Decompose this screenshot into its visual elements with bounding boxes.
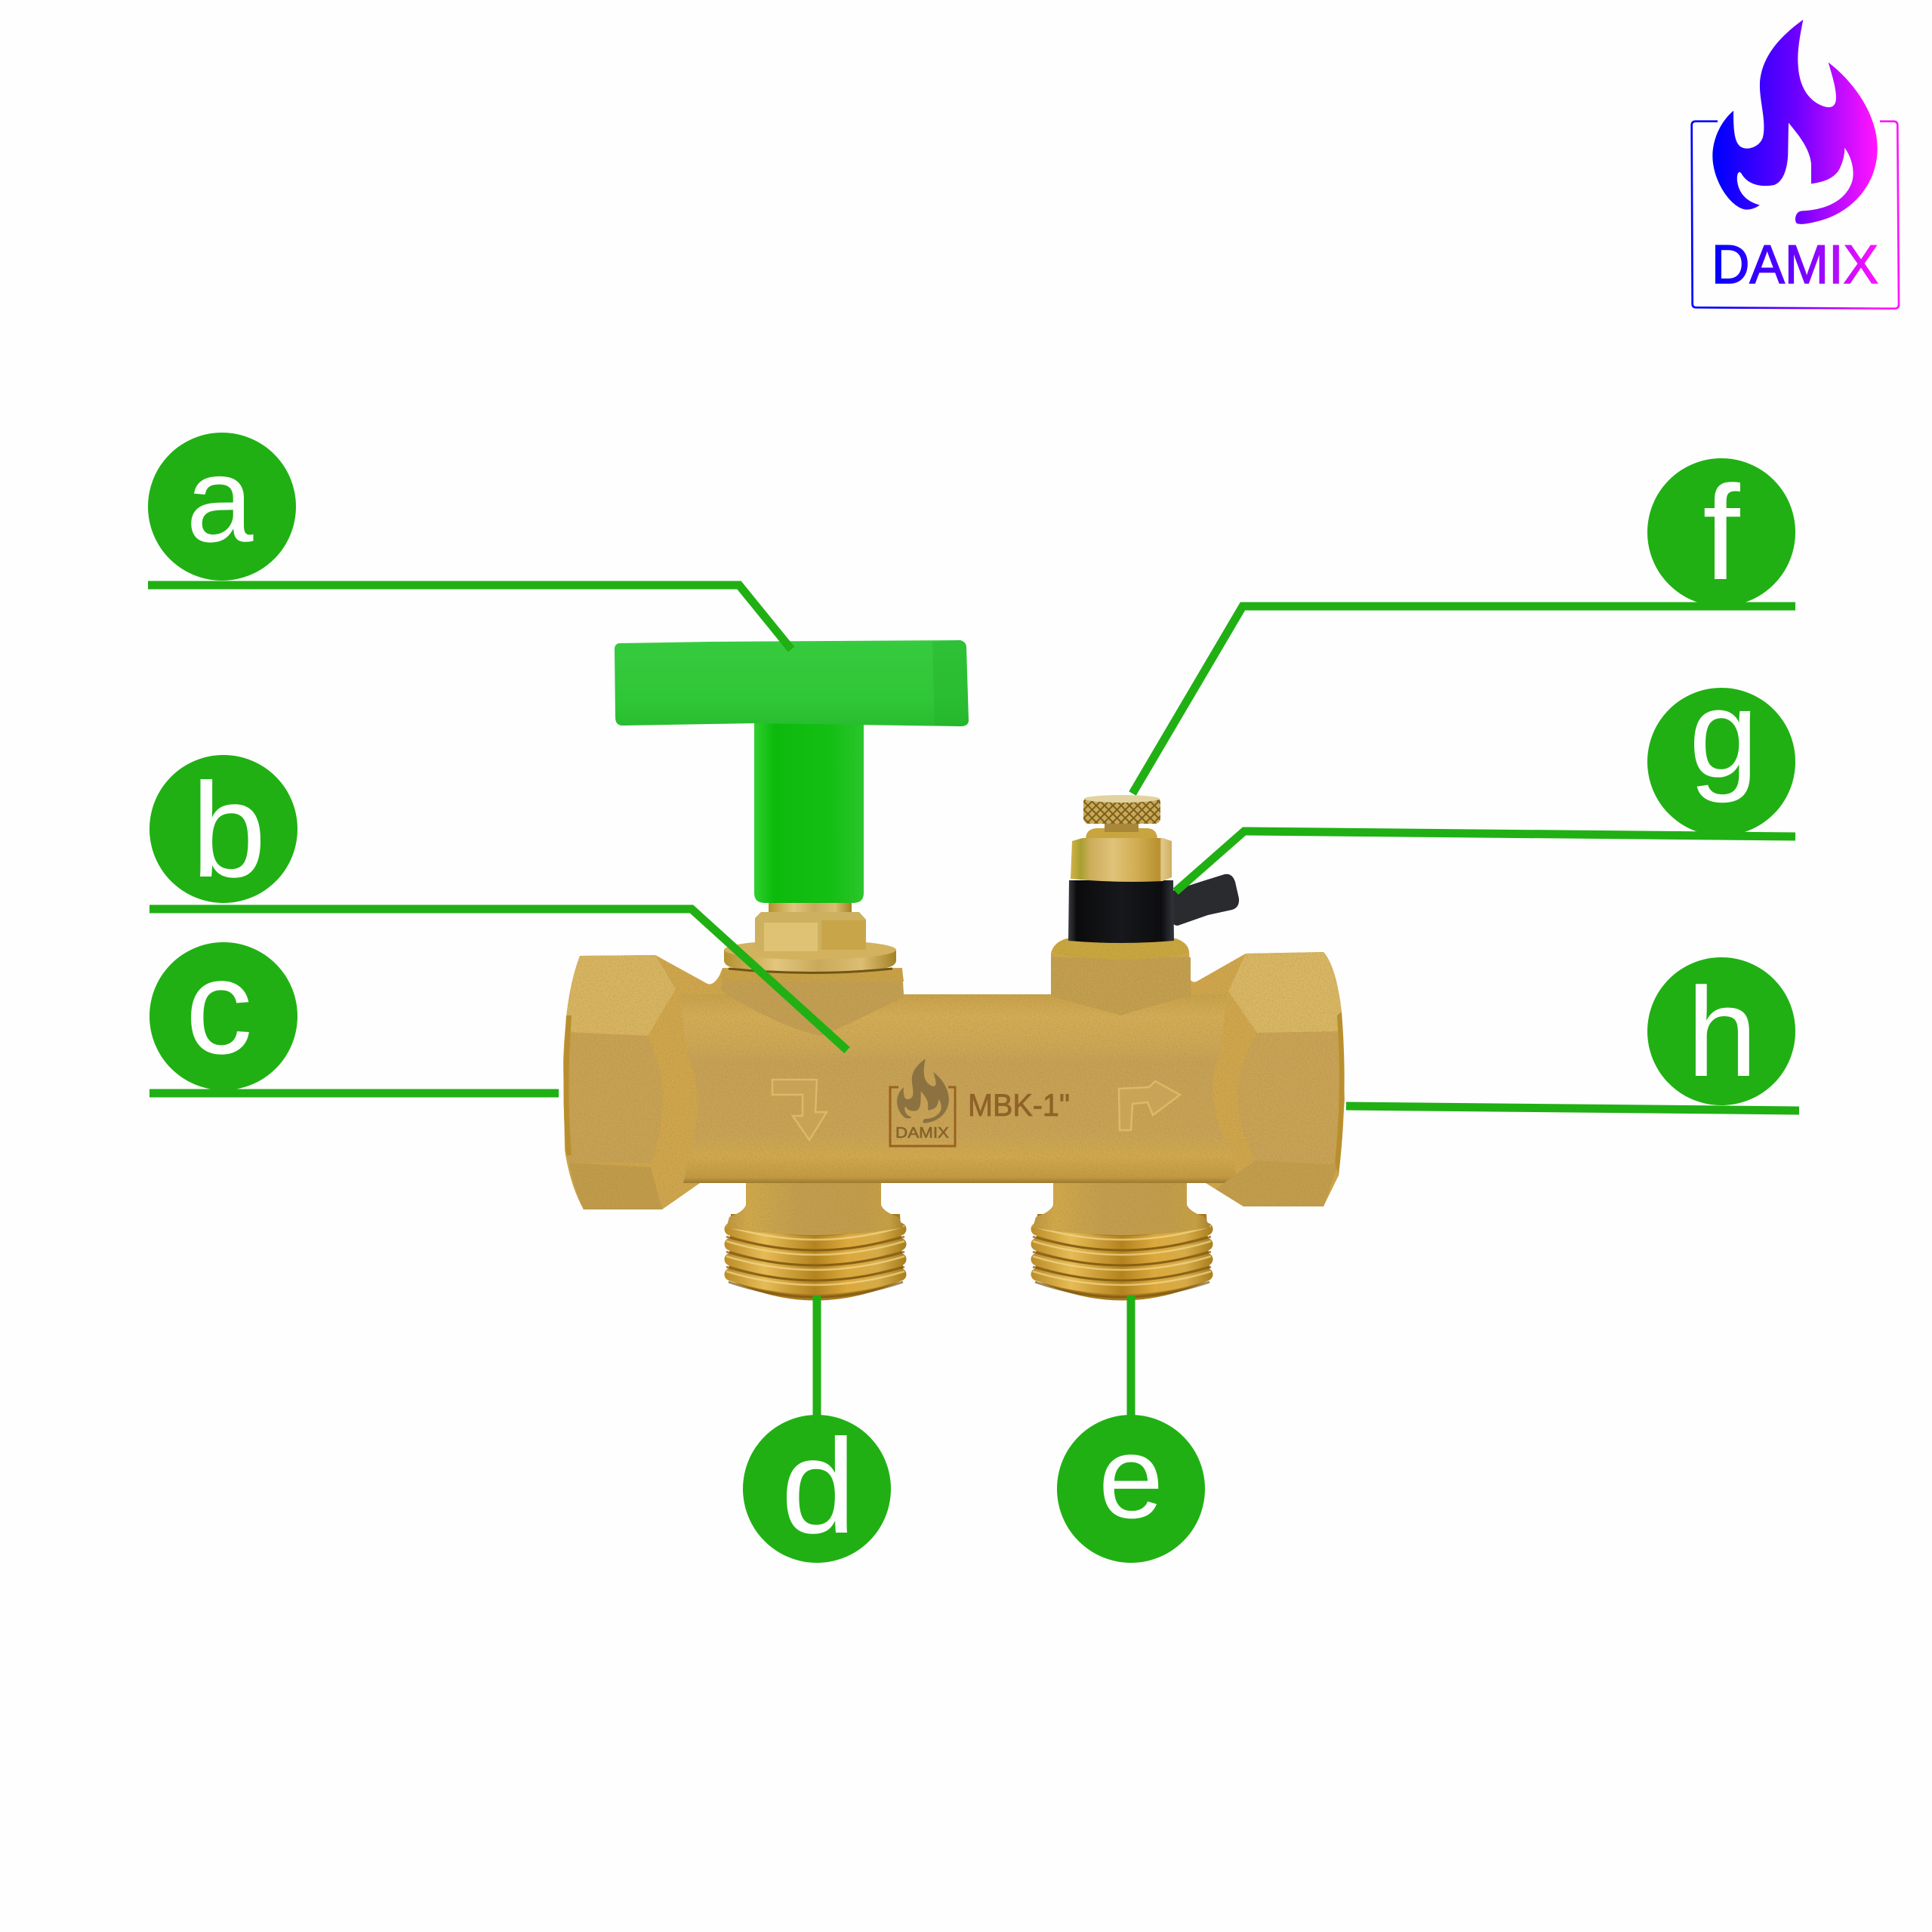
flange side [724, 950, 896, 972]
flange top [724, 940, 896, 960]
leader f [1132, 606, 1795, 793]
letter b: b [192, 755, 266, 905]
circle d [743, 1415, 891, 1563]
engraved arrow left [772, 1080, 827, 1140]
letter h: h [1687, 961, 1758, 1103]
logo frame [1692, 122, 1899, 309]
letter f: f [1702, 458, 1740, 608]
body silhouette [563, 938, 1345, 1209]
left neck rim [721, 969, 904, 981]
circle a [148, 433, 296, 581]
lower right neck and flare [1033, 1178, 1210, 1235]
engraved logo [890, 1058, 955, 1146]
left top neck shading [721, 972, 904, 1036]
green T handle [615, 640, 969, 903]
circle e [1057, 1415, 1205, 1563]
right neck rim [1053, 938, 1188, 960]
logo flame and frame [1692, 20, 1899, 309]
leader e [1126, 1296, 1135, 1434]
leader b [149, 909, 847, 1050]
product: brass manifold valve [563, 640, 1345, 1300]
leader d [812, 1296, 821, 1434]
engraved arrow right [1119, 1081, 1180, 1130]
inner thread slivers [563, 1012, 1345, 1176]
lower left neck and flare [726, 1178, 904, 1235]
circle f [1647, 458, 1795, 606]
letter e: e [1098, 1412, 1163, 1542]
handle grip [615, 640, 969, 726]
air vent assembly [1068, 795, 1239, 943]
engraved logo word: DAMIX [895, 1125, 949, 1142]
badge d [743, 1411, 891, 1563]
right hex middle facet [1237, 1031, 1344, 1165]
circle h [1647, 957, 1795, 1105]
hex nut [755, 902, 866, 951]
badge h [1647, 957, 1795, 1105]
vent hose barb [1170, 874, 1239, 926]
left outlet thread [726, 1214, 904, 1300]
logo: DAMIX [1692, 20, 1899, 309]
nut left facet [764, 923, 818, 951]
leader h [1346, 1106, 1799, 1111]
engraved flame [897, 1058, 949, 1123]
letter g: g [1689, 664, 1758, 803]
left hex bottom facet [569, 1163, 662, 1209]
circle c [149, 942, 297, 1090]
leader a [148, 585, 791, 649]
right hex bottom facet [1216, 1160, 1338, 1206]
nut body [755, 912, 866, 950]
handle stem [754, 721, 864, 903]
brass flange under handle [724, 940, 896, 972]
vent brass collar [1071, 838, 1172, 882]
flange shadow line [729, 969, 892, 972]
badge a [148, 432, 296, 581]
badge b [149, 755, 297, 905]
vent stem [1105, 821, 1139, 832]
letter c: c [186, 932, 252, 1082]
leader g [1176, 831, 1795, 892]
vent dome [1086, 828, 1157, 840]
vent knob top [1084, 795, 1160, 803]
badge c [149, 932, 297, 1090]
handle end facet [932, 640, 969, 726]
vent black body [1068, 880, 1174, 943]
logo wordmark: DAMIX [1712, 235, 1878, 295]
right thread core [1035, 1214, 1210, 1300]
left hex middle facet [563, 1033, 663, 1163]
badge f [1647, 458, 1795, 608]
left thread core [729, 1214, 904, 1300]
badge g [1647, 664, 1795, 836]
nut right facet [821, 920, 866, 950]
engraved frame [890, 1087, 955, 1146]
nut neck [769, 902, 852, 917]
right top neck shading [1051, 957, 1191, 1015]
left hex top facet [566, 955, 676, 1036]
circle b [149, 755, 297, 903]
circle g [1647, 688, 1795, 836]
letter d: d [781, 1411, 856, 1561]
right outlet thread [1033, 1214, 1211, 1300]
logo flame [1712, 20, 1878, 224]
right hex top facet [1228, 952, 1342, 1033]
engraved model label: MBK-1" [968, 1087, 1070, 1123]
vent knurled knob [1083, 797, 1160, 824]
cast body with grain [563, 938, 1345, 1235]
badge e [1057, 1412, 1205, 1563]
leader c [149, 1089, 559, 1098]
main tube [679, 994, 1238, 1183]
letter a: a [186, 432, 254, 567]
